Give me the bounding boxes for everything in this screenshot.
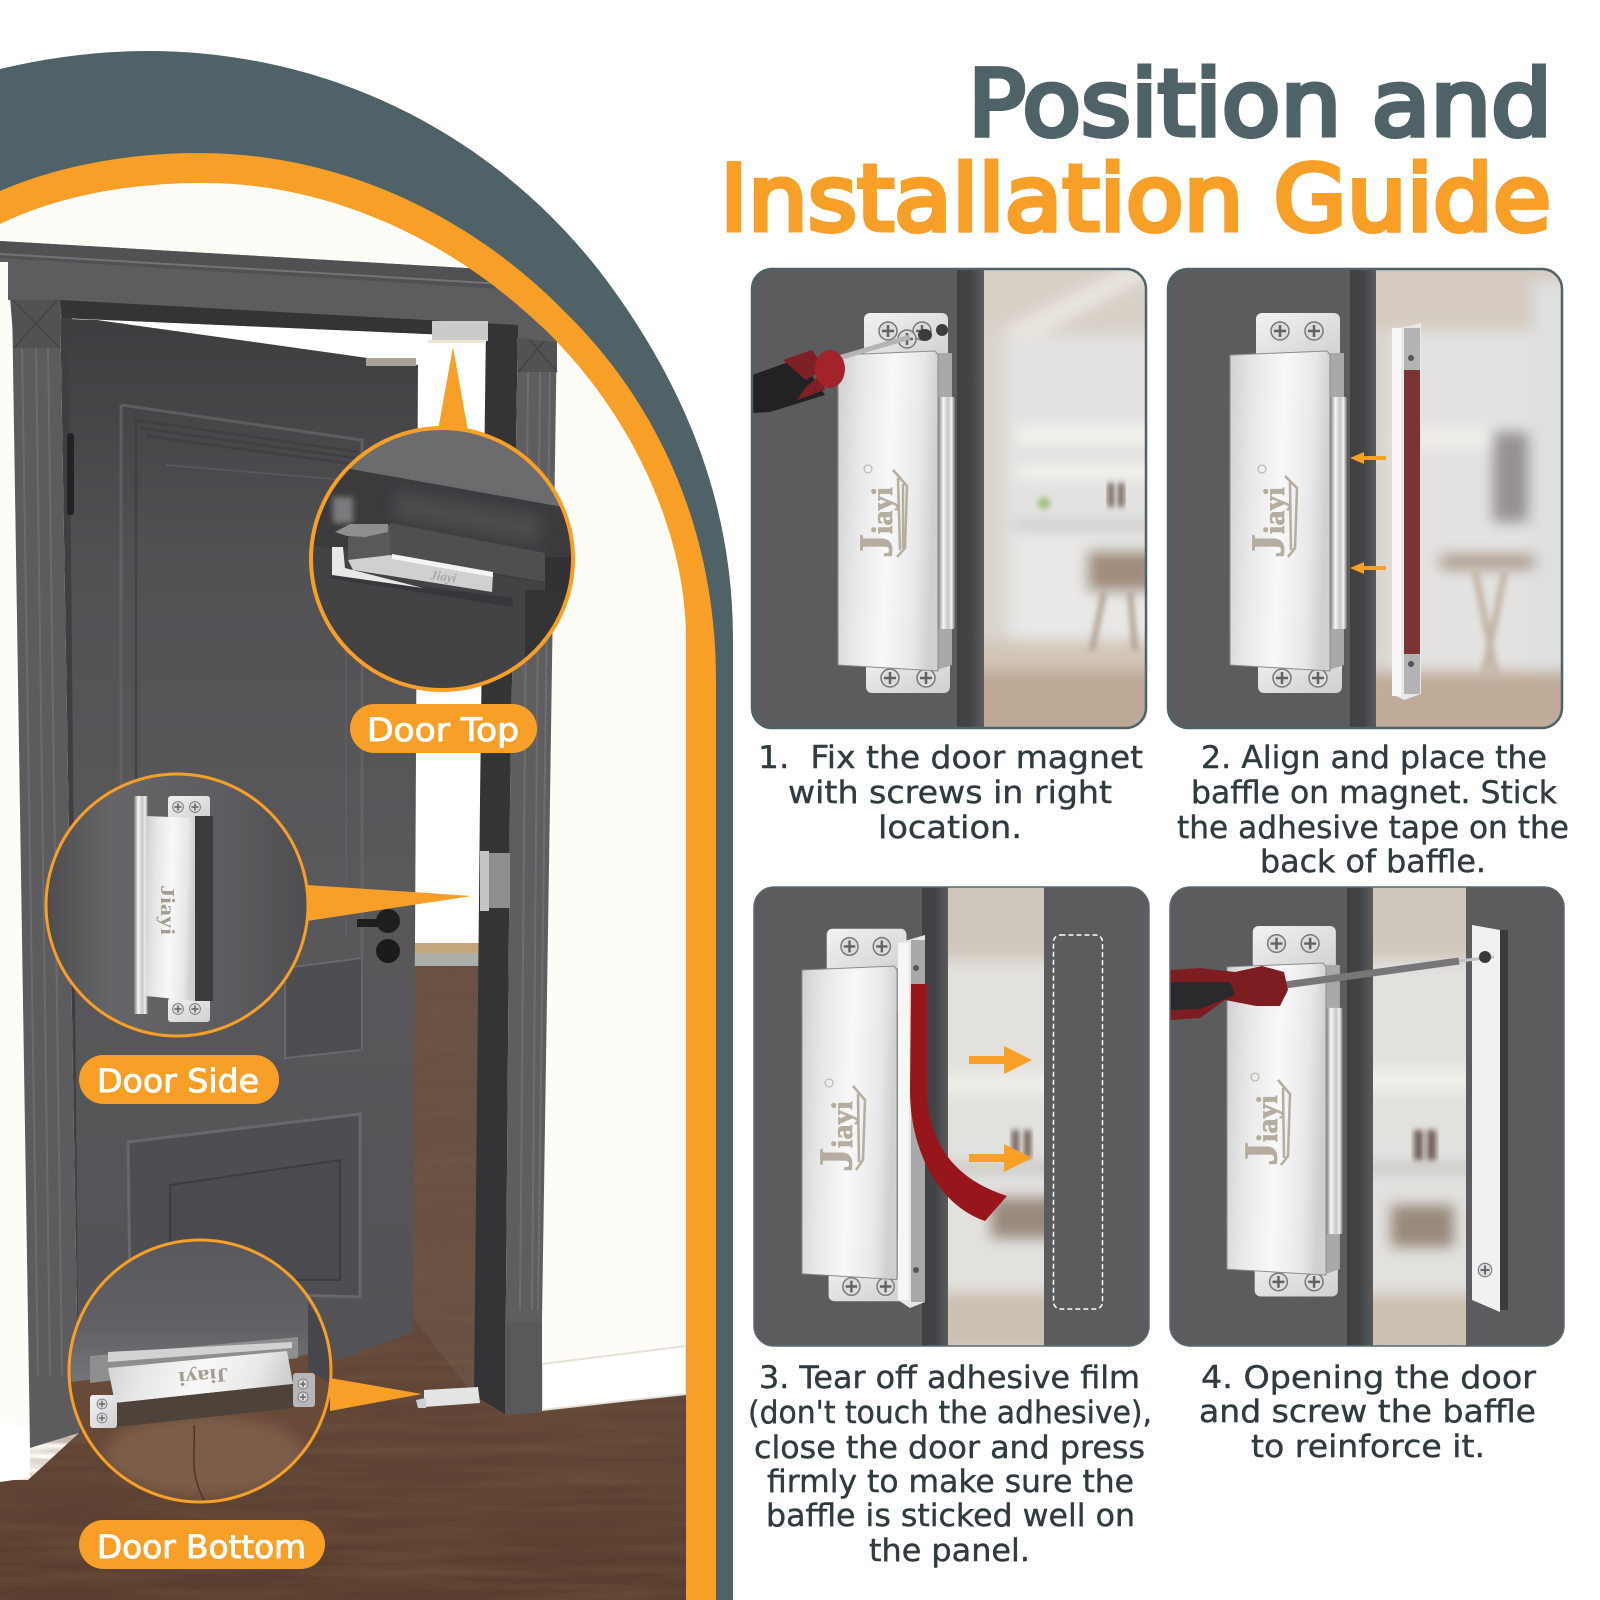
blurred room photo (1373, 888, 1466, 1346)
caption: step 1: with screws in right (788, 775, 1112, 811)
caption: step 3: firmly to make sure the (767, 1464, 1134, 1500)
panel: step 1 (750, 268, 1148, 730)
left casing (10, 297, 79, 1448)
label: Door Side: Door Side (97, 1062, 259, 1100)
blurred room photo (1376, 270, 1561, 727)
caption: step 1: 1. Fix the door magnet (758, 740, 1143, 776)
pointer: door top (438, 347, 468, 431)
title (720, 52, 1552, 252)
label: Door Bottom: Door Bottom (97, 1528, 306, 1566)
door panel (60, 300, 418, 1433)
caption: step 2: baffle on magnet. Stick (1191, 775, 1557, 811)
magnet (838, 313, 955, 693)
caption: step 2 (1177, 740, 1569, 880)
baffle side (898, 935, 925, 1308)
floor (0, 1315, 686, 1600)
caption: step 2: 2. Align and place the (1201, 740, 1547, 776)
baffle (1472, 925, 1508, 1312)
caption: step 3: close the door and press (754, 1430, 1145, 1466)
pointer: door bottom (330, 1378, 422, 1411)
caption: step 2: the adhesive tape on the (1177, 810, 1569, 846)
small magnet at door bottom (416, 1387, 480, 1408)
arrows (969, 1046, 1032, 1172)
arrows (1350, 452, 1386, 574)
arch band: orange (0, 153, 716, 1600)
left wall baseboard (0, 1420, 28, 1482)
label: Door Bottom (79, 1520, 325, 1569)
dashed baffle outline (1054, 935, 1102, 1309)
hinge (67, 433, 74, 515)
pointer: door side (307, 885, 472, 921)
right casing (505, 325, 557, 1415)
logo: Jiayi (850, 487, 903, 558)
blurred room photo (984, 270, 1145, 727)
magnet (1227, 926, 1343, 1296)
adhesive film peeling (910, 984, 1007, 1221)
right wall baseboard (542, 1346, 686, 1410)
door handle and lock (357, 909, 400, 963)
caption: step 4: and screw the baffle (1199, 1394, 1536, 1430)
callout: door top circle (309, 426, 575, 692)
logo on magnet (door side): Jiayi (156, 885, 178, 936)
title: Position and (968, 52, 1552, 157)
label: Door Top: Door Top (367, 711, 519, 749)
caption: step 3: the panel. (869, 1533, 1030, 1569)
callout: door side circle (44, 772, 308, 1038)
caption: step 3: baffle is sticked well on (766, 1498, 1135, 1534)
door header and cornice (0, 241, 580, 345)
magnet (802, 929, 913, 1301)
arch band: teal (0, 51, 733, 1600)
panel: step 4 (1170, 870, 1564, 1354)
logo: Jiayi (1242, 487, 1295, 558)
baffle with adhesive (1392, 323, 1421, 700)
logo: Jiayi (1235, 1095, 1288, 1166)
interior view beyond door (413, 943, 490, 1406)
caption: step 3: 3. Tear off adhesive film (759, 1360, 1140, 1396)
caption: step 4 (1199, 1360, 1536, 1465)
caption: step 1 (758, 740, 1143, 846)
right door jamb (474, 325, 518, 1415)
screwdriver (752, 324, 948, 413)
callout: door bottom circle (60, 1235, 340, 1510)
door scene (0, 150, 690, 1600)
small magnet at door side (480, 851, 510, 911)
logo on magnet (door bottom): Jiayi (177, 1363, 229, 1389)
caption: step 4: 4. Opening the door (1201, 1360, 1536, 1396)
caption: step 3 (748, 1360, 1152, 1569)
caption: step 2: back of baffle. (1260, 844, 1486, 880)
logo on magnet (door top): Jiayi (429, 567, 458, 586)
title: Installation Guide (720, 147, 1551, 252)
screwdriver (1170, 951, 1494, 1020)
caption: step 4: to reinforce it. (1251, 1429, 1485, 1465)
blurred room photo (948, 888, 1044, 1346)
panel: step 3 (754, 870, 1149, 1352)
caption: step 1: location. (878, 810, 1022, 846)
logo: Jiayi (810, 1101, 863, 1172)
label: Door Top (350, 704, 537, 753)
magnet (1230, 313, 1347, 693)
small magnet at door top (428, 321, 488, 343)
caption: step 3: (don't touch the adhesive), (748, 1395, 1152, 1431)
panel: step 2 (1168, 250, 1582, 742)
label: Door Side (79, 1055, 279, 1104)
